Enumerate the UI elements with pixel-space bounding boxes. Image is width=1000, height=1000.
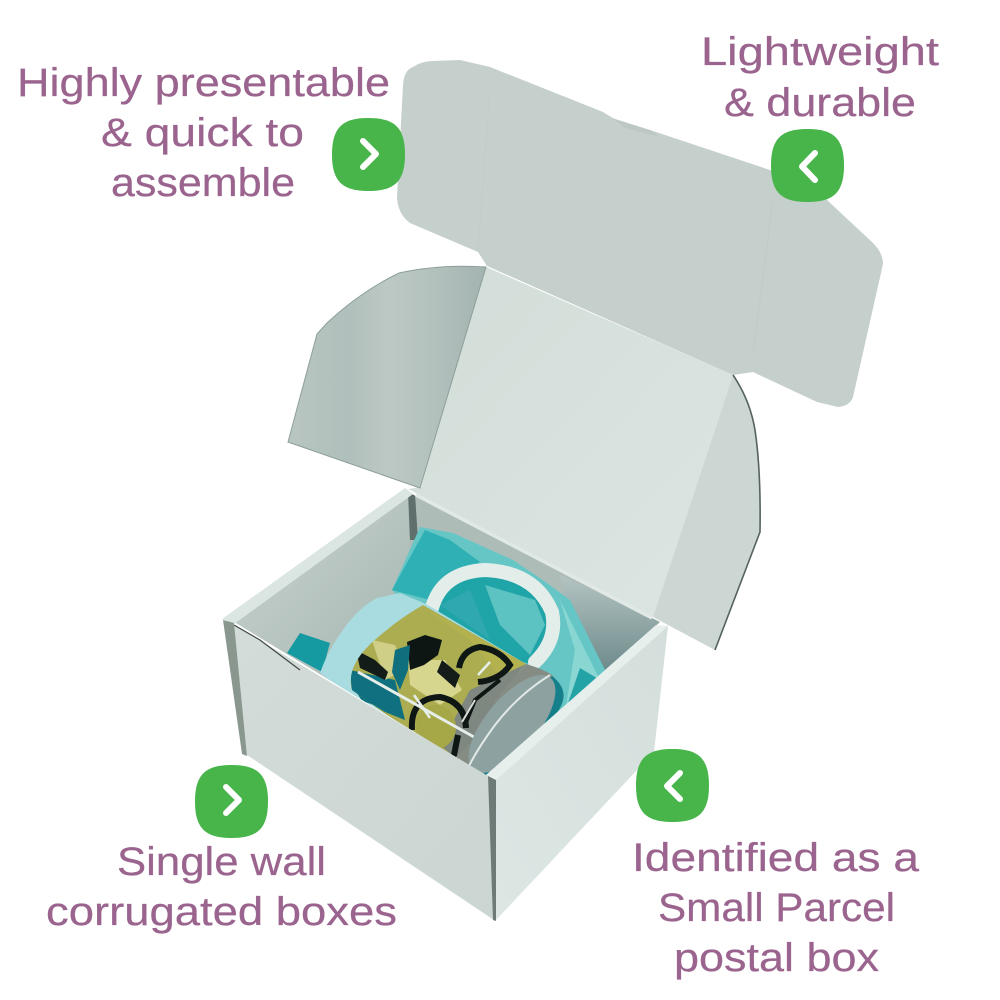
front-left wall bbox=[234, 625, 494, 920]
interior walls bbox=[234, 492, 660, 776]
label: single wall: corrugated boxes bbox=[46, 890, 397, 934]
mug print bbox=[350, 605, 526, 758]
box interior bbox=[234, 492, 660, 787]
label: small parcel: Small Parcel bbox=[658, 886, 895, 930]
mug handle bbox=[432, 570, 553, 664]
icon: right chevron badge, top left bbox=[332, 118, 405, 191]
label: small parcel bbox=[632, 836, 920, 980]
icon: left chevron badge, bottom right bbox=[636, 749, 709, 822]
back panel of lid bbox=[408, 267, 733, 617]
mug base bbox=[456, 664, 564, 775]
label: highly presentable: Highly presentable bbox=[17, 61, 390, 105]
label: highly presentable bbox=[17, 61, 390, 205]
back rim bbox=[416, 495, 652, 618]
box illustration bbox=[222, 60, 883, 921]
rider bbox=[407, 635, 442, 670]
left dust flap bbox=[288, 266, 486, 488]
front corner edge bbox=[488, 776, 496, 921]
right rim bbox=[486, 625, 668, 780]
label: small parcel: postal box bbox=[674, 936, 879, 980]
bicycle wheels bbox=[459, 647, 510, 682]
label: lightweight: & durable bbox=[724, 81, 916, 125]
icon: left chevron badge, top right bbox=[771, 129, 844, 202]
right dust flap bbox=[653, 375, 760, 650]
lid creases bbox=[478, 90, 773, 353]
mug body bbox=[320, 593, 526, 758]
label: small parcel: Identified as a bbox=[632, 836, 920, 880]
label: single wall bbox=[46, 840, 397, 934]
label: highly presentable: & quick to bbox=[101, 111, 304, 155]
label: highly presentable: assemble bbox=[111, 161, 295, 205]
tissue paper bbox=[392, 527, 605, 715]
icon: right chevron badge, bottom left bbox=[195, 765, 268, 838]
label: lightweight: Lightweight bbox=[701, 30, 939, 74]
label: lightweight bbox=[701, 30, 939, 125]
label: single wall: Single wall bbox=[117, 840, 326, 884]
left edge strip bbox=[223, 620, 247, 756]
right wall bbox=[496, 626, 668, 920]
lid flap bbox=[397, 60, 883, 407]
left rim bbox=[222, 488, 413, 624]
